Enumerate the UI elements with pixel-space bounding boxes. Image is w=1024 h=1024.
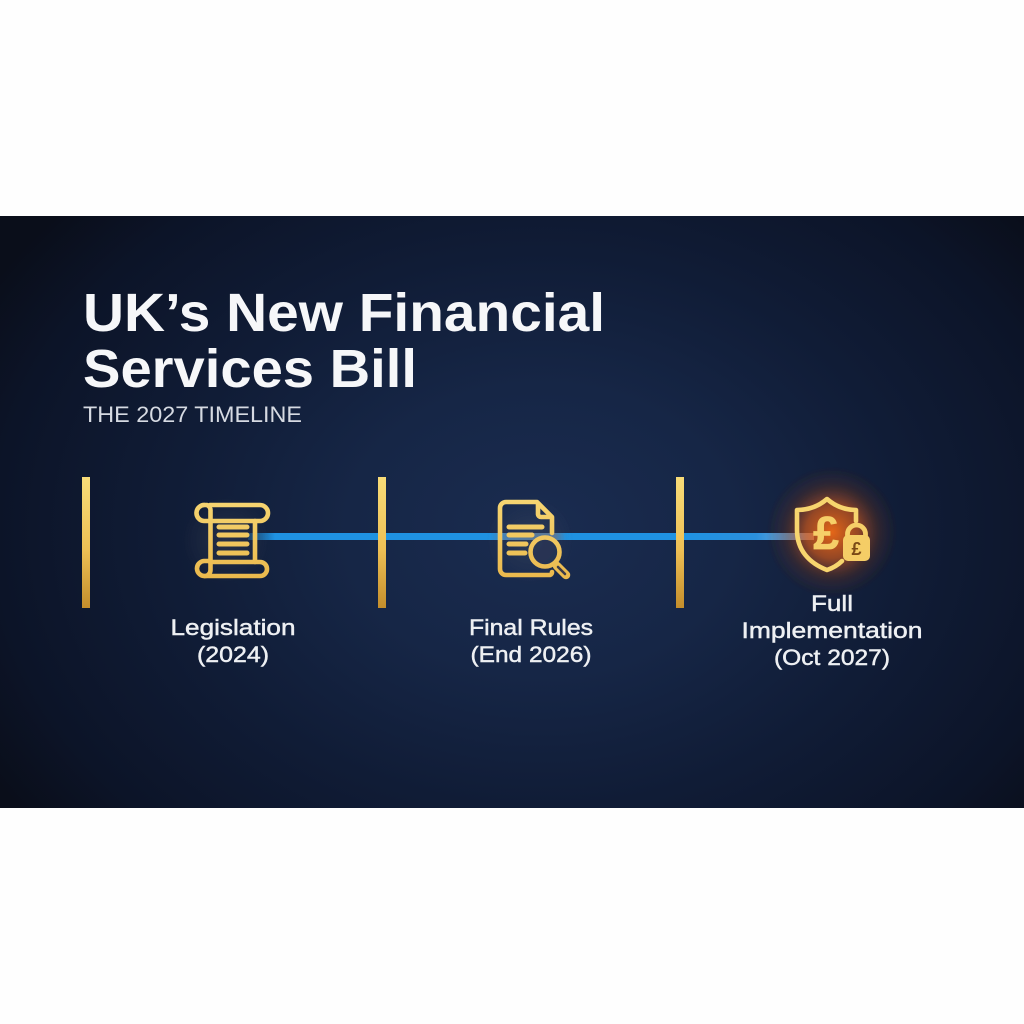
icon: shield with pound and padlock bbox=[766, 466, 898, 598]
padlock: £ bbox=[851, 539, 862, 559]
subtitle: THE 2027 TIMELINE bbox=[83, 402, 302, 427]
title bbox=[83, 283, 605, 399]
title: UK’s New Financial bbox=[83, 283, 605, 343]
timeline marker: 2024 start bbox=[82, 477, 90, 608]
label: full implementation: (Oct 2027) bbox=[774, 645, 890, 670]
icon: document with magnifier bbox=[486, 496, 574, 584]
timeline marker: 2026 bbox=[378, 477, 386, 608]
title: Services Bill bbox=[83, 339, 417, 399]
icon: scroll bbox=[182, 496, 270, 584]
dark panel background bbox=[0, 216, 1024, 808]
label: full implementation: Implementation bbox=[742, 618, 922, 643]
label: final rules: (End 2026) bbox=[470, 642, 592, 667]
label: final rules bbox=[469, 615, 593, 667]
label: final rules: Final Rules bbox=[469, 615, 593, 640]
label: legislation: Legislation bbox=[170, 615, 296, 640]
icon: shield with pound and padlock: £ bbox=[813, 507, 839, 559]
label: legislation bbox=[170, 615, 296, 667]
label: full implementation: Full bbox=[811, 591, 853, 616]
label: full implementation bbox=[742, 591, 922, 670]
timeline marker: 2027 bbox=[676, 477, 684, 608]
timeline connector line bbox=[248, 533, 814, 540]
label: legislation: (2024) bbox=[197, 642, 269, 667]
